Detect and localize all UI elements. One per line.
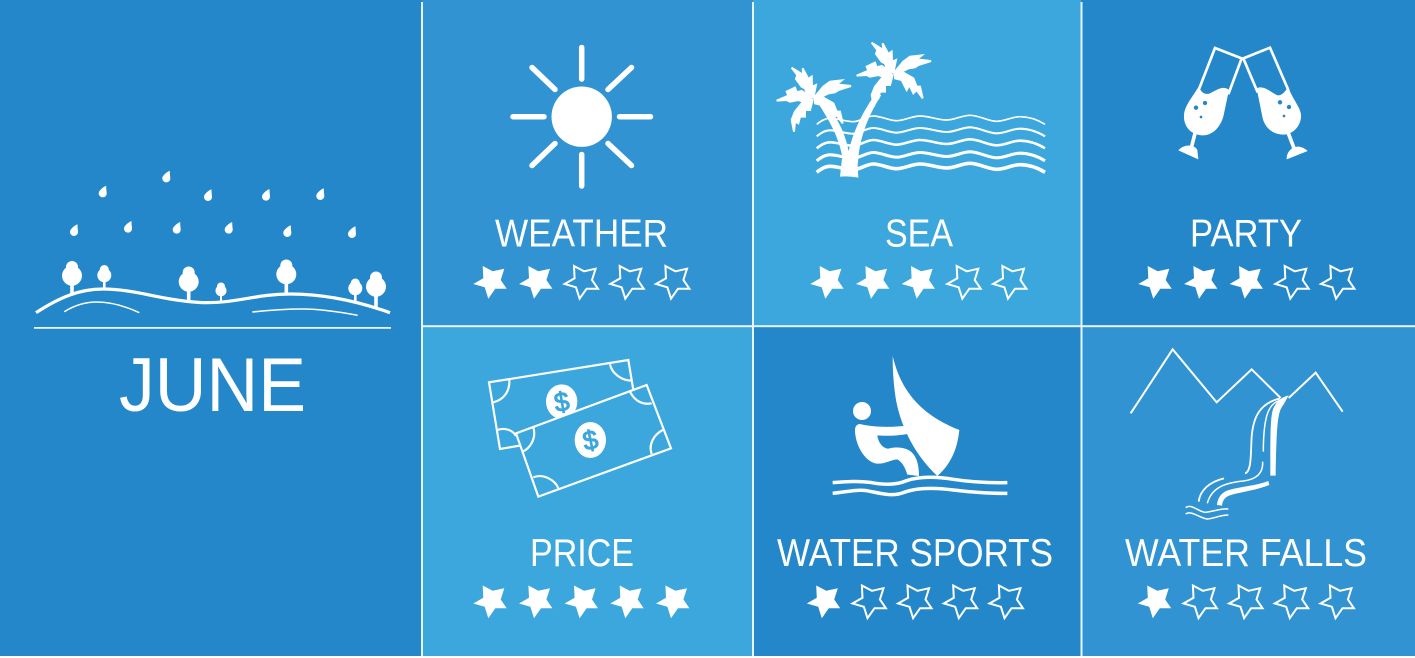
title: June: JUNE xyxy=(119,343,306,428)
rating: price 5 of 5 xyxy=(473,586,689,618)
icon: rainy landscape xyxy=(36,171,390,315)
label: price: PRICE xyxy=(530,532,634,575)
rating: sea 3 of 5 xyxy=(810,266,1026,299)
panel: sea xyxy=(753,0,1081,326)
rating: water falls 1 of 5 xyxy=(1138,586,1354,618)
label: sea: SEA xyxy=(885,213,953,256)
icon: waves xyxy=(817,115,1045,172)
label: water sports: WATER SPORTS xyxy=(777,532,1053,575)
icon: water xyxy=(833,477,1007,495)
rating: party 3 of 5 xyxy=(1138,266,1354,299)
panel: price xyxy=(422,326,753,656)
rating: weather 2 of 5 xyxy=(473,266,689,299)
icon: front banknote: $ xyxy=(580,424,601,457)
icon: sail xyxy=(893,356,959,476)
icon: champagne glasses xyxy=(1178,48,1308,159)
icon: waterfall xyxy=(1186,395,1289,519)
icon: sailing xyxy=(833,356,1007,495)
icon: banknotes xyxy=(489,360,671,497)
icon: rain drops xyxy=(70,171,356,238)
icon: mountains and waterfall xyxy=(1131,349,1343,519)
icon: palm trees and sea xyxy=(777,43,1045,178)
icon: palms xyxy=(777,43,931,178)
label: weather: WEATHER xyxy=(495,213,668,256)
icon: trees xyxy=(62,260,386,307)
icon: front banknote xyxy=(516,385,671,497)
icon: sailor xyxy=(853,402,919,476)
icon: hills xyxy=(36,289,390,315)
icon: right glass xyxy=(1243,48,1308,159)
panel: weather xyxy=(422,0,753,326)
rating: water sports 1 of 5 xyxy=(807,586,1023,618)
panel: water falls xyxy=(1081,326,1415,656)
icon: sun xyxy=(513,48,650,186)
panel: party xyxy=(1081,0,1415,326)
panel: June overview xyxy=(0,0,422,656)
icon: back banknote: $ xyxy=(552,386,572,418)
label: party: PARTY xyxy=(1190,213,1302,256)
label: water falls: WATER FALLS xyxy=(1125,532,1367,575)
icon: left glass xyxy=(1178,48,1242,159)
icon: back banknote xyxy=(489,360,633,449)
icon: mountains xyxy=(1131,349,1343,413)
panel: water sports xyxy=(753,326,1081,656)
